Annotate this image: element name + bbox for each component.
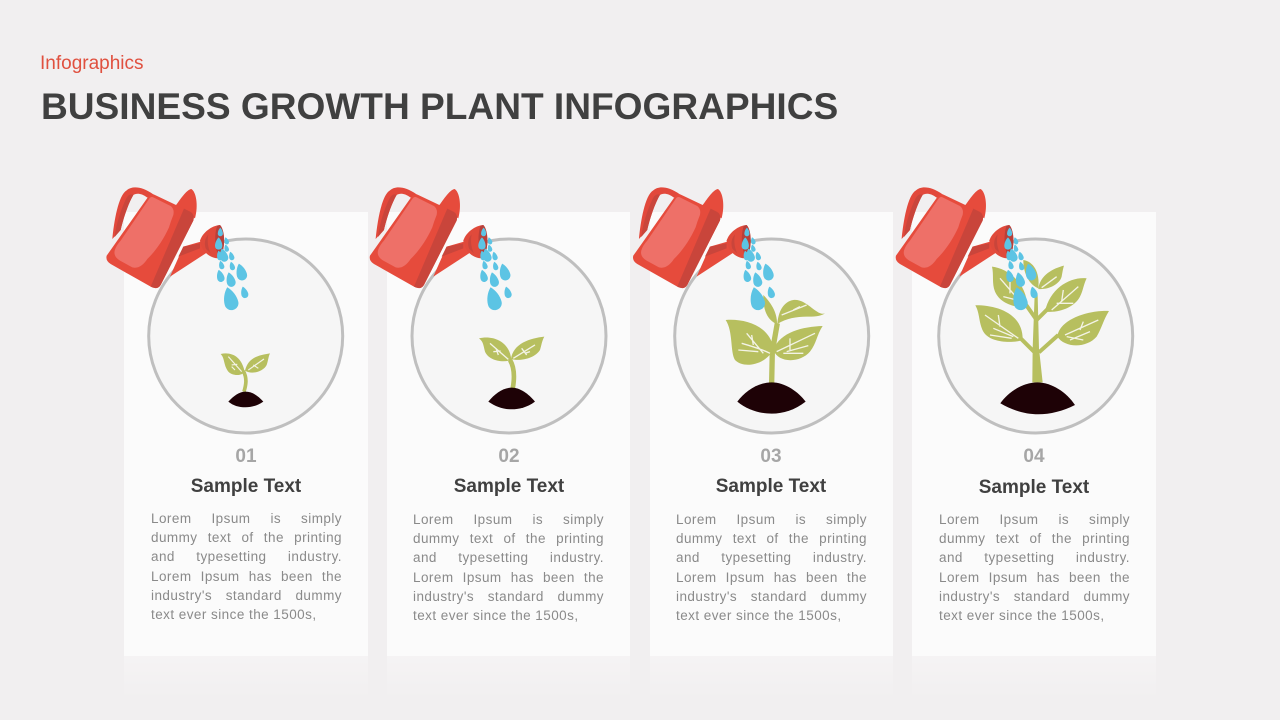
body text 2: dummy text of the printing <box>413 531 604 546</box>
watering can 3 <box>633 187 776 312</box>
plant 2: sprout <box>479 337 544 409</box>
body text 2: Lorem Ipsum is simply <box>413 512 604 527</box>
body text 3: industry's standard dummy <box>676 589 867 604</box>
circle 4 <box>939 239 1133 433</box>
number 01: 01 <box>235 446 257 467</box>
body text 1: text ever since the 1500s, <box>151 607 317 622</box>
plant 1: small sprout <box>221 353 270 407</box>
body text 1: industry's standard dummy <box>151 588 342 603</box>
body text 3: text ever since the 1500s, <box>676 608 842 623</box>
body text 4: dummy text of the printing <box>939 531 1130 546</box>
reflection: step 3 <box>650 656 893 700</box>
body text 2: and typesetting industry. <box>413 550 604 565</box>
panel: step 4 background <box>912 212 1156 656</box>
body text 1: Lorem Ipsum has been the <box>151 569 342 584</box>
circle 3 <box>675 239 869 433</box>
body text 2: industry's standard dummy <box>413 589 604 604</box>
reflection: step 1 <box>124 656 368 700</box>
body text 1: and typesetting industry. <box>151 549 342 564</box>
heading 2: Sample Text <box>454 476 564 497</box>
body text 3: Lorem Ipsum has been the <box>676 570 867 585</box>
body text 3: and typesetting industry. <box>676 550 867 565</box>
plant 4: grown plant <box>975 260 1109 414</box>
body text 4: Lorem Ipsum is simply <box>939 512 1130 527</box>
body text 3 <box>676 512 867 623</box>
number 02: 02 <box>498 446 520 467</box>
panel: step 1 background <box>124 212 368 656</box>
reflection: step 4 <box>912 656 1156 700</box>
body text 1: dummy text of the printing <box>151 530 342 545</box>
number 03: 03 <box>760 446 782 467</box>
watering can 2 <box>370 187 512 312</box>
body text 3: dummy text of the printing <box>676 531 867 546</box>
circle 2 <box>412 239 606 433</box>
subtitle: Infographics <box>40 53 144 74</box>
circle 1 <box>149 239 343 433</box>
reflection: step 2 <box>387 656 630 700</box>
body text 4: industry's standard dummy <box>939 589 1130 604</box>
body text 4: Lorem Ipsum has been the <box>939 570 1130 585</box>
watering can 4 <box>896 187 1038 312</box>
heading 3: Sample Text <box>716 476 826 497</box>
body text 1: Lorem Ipsum is simply <box>151 511 342 526</box>
body text 4: and typesetting industry. <box>939 550 1130 565</box>
body text 2: text ever since the 1500s, <box>413 608 579 623</box>
body text 1 <box>151 511 342 622</box>
body text 2: Lorem Ipsum has been the <box>413 570 604 585</box>
plant 3: young plant <box>726 295 825 414</box>
title: BUSINESS GROWTH PLANT INFOGRAPHICS <box>41 85 838 127</box>
body text 4 <box>939 512 1130 623</box>
watering can 1 <box>106 187 249 312</box>
number 04: 04 <box>1023 446 1045 467</box>
body text 3: Lorem Ipsum is simply <box>676 512 867 527</box>
heading 4: Sample Text <box>979 477 1089 498</box>
body text 4: text ever since the 1500s, <box>939 608 1105 623</box>
panel: step 3 background <box>650 212 893 656</box>
panel: step 2 background <box>387 212 630 656</box>
heading 1: Sample Text <box>191 476 301 497</box>
body text 2 <box>413 512 604 623</box>
